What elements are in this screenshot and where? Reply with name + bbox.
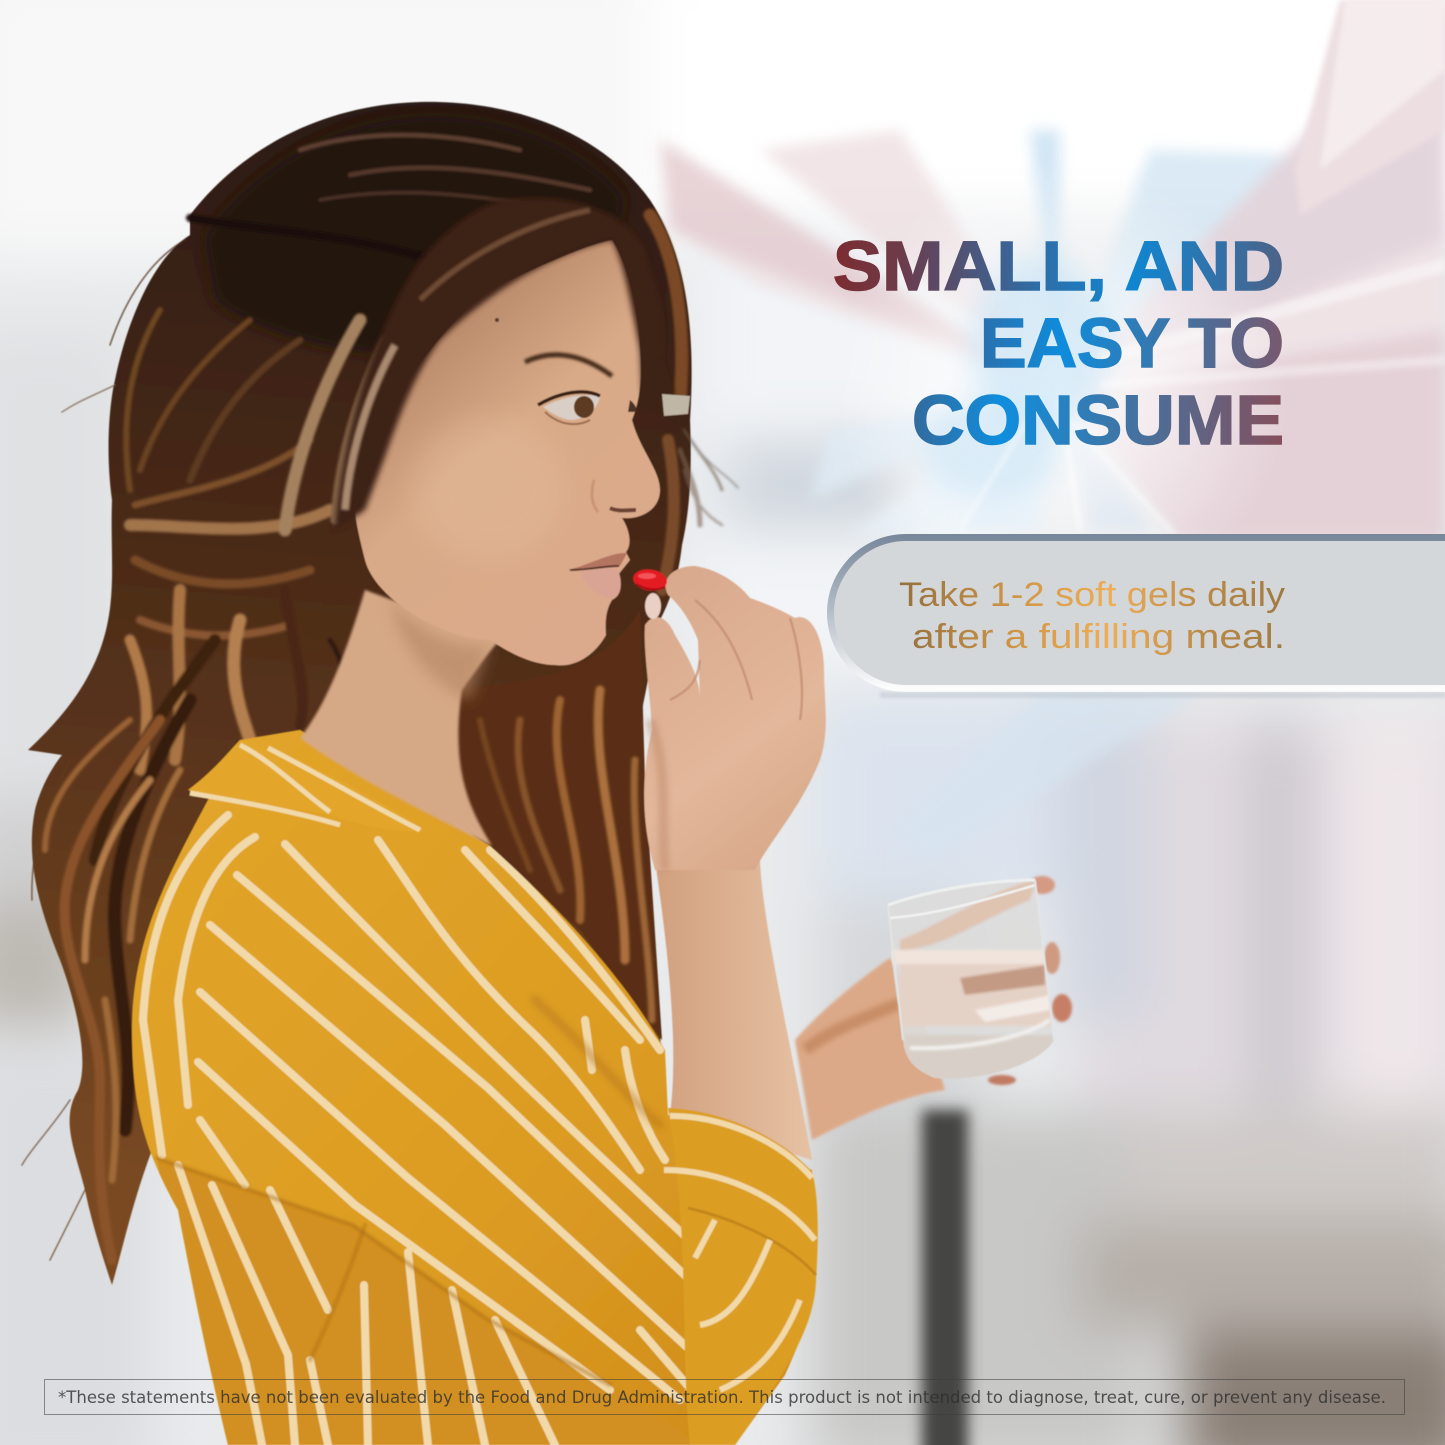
other forearm and hand holding glass xyxy=(795,876,1072,1140)
hair over forehead xyxy=(335,197,682,530)
water glass xyxy=(888,880,1060,1080)
nose shading and nostril xyxy=(610,508,636,510)
neck and chest xyxy=(300,590,500,846)
shirt folds xyxy=(157,1158,610,1385)
eye xyxy=(538,392,636,424)
face xyxy=(354,240,660,665)
hair dark crown xyxy=(205,118,623,352)
callout text: Take 1-2 soft gels daily xyxy=(899,576,1285,614)
soft gel capsule xyxy=(632,567,668,593)
hand holding soft gel xyxy=(644,566,826,870)
flyaway wisps xyxy=(22,240,185,1260)
callout text xyxy=(899,576,1285,656)
woman illustration xyxy=(22,102,1072,1445)
dark pole xyxy=(922,1110,968,1445)
lips xyxy=(567,553,627,570)
light rays burst xyxy=(660,0,1445,860)
title: small, and easy to consume: CONSUME xyxy=(912,381,1284,459)
title: small, and easy to consume xyxy=(833,227,1284,459)
white ray lines xyxy=(960,265,1445,535)
shirt xyxy=(132,730,816,1445)
sleeve cuff xyxy=(664,1108,818,1445)
shirt collar xyxy=(188,740,425,831)
callout: dosage instructions xyxy=(827,534,1445,698)
wisps beyond the face xyxy=(680,430,738,525)
lower body panel xyxy=(158,1159,494,1445)
title: small, and easy to consume: SMALL, AND xyxy=(833,227,1284,305)
title: small, and easy to consume: EASY TO xyxy=(980,304,1284,382)
eyebrow xyxy=(525,355,612,376)
hair back xyxy=(28,102,692,1285)
forearm xyxy=(655,860,812,1160)
disclaimer box xyxy=(44,1380,1404,1414)
ear xyxy=(348,479,361,512)
stripes xyxy=(143,815,700,1445)
callout text: after a fulfilling meal. xyxy=(912,618,1285,656)
disclaimer box: *These statements have not been evaluated by the Food and Drug Administration. This product is not intended to diagnose, treat, cure, or prevent any disease. xyxy=(58,1388,1386,1408)
hair strands xyxy=(22,135,738,1260)
